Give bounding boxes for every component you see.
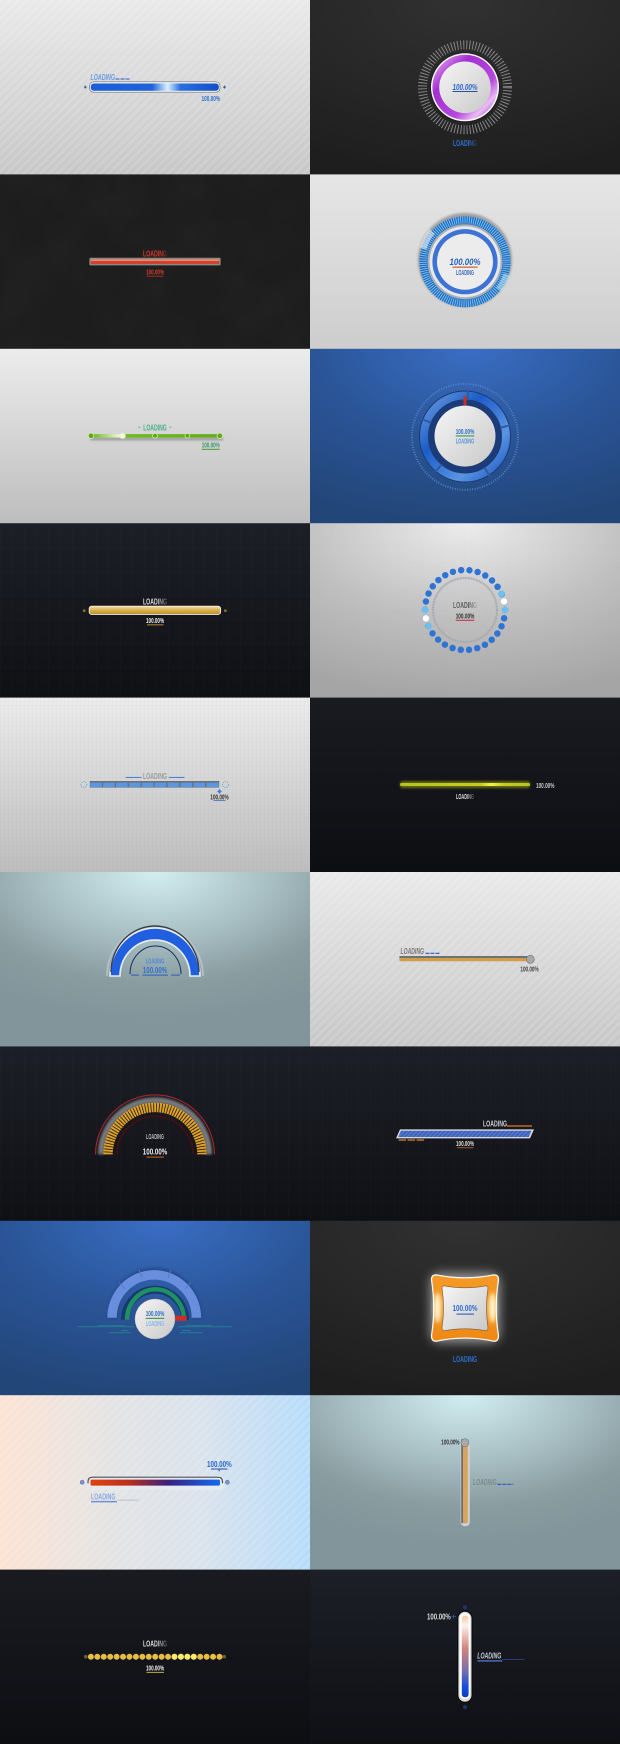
end dots (463, 1605, 467, 1709)
dashed end circles (81, 782, 228, 788)
panel 4: blue segmented dial on light background (310, 174, 620, 349)
red outer arc (96, 1095, 214, 1154)
panel 15: multi-arc gauge with knob (0, 1221, 310, 1396)
underline (214, 799, 226, 802)
percentage: 100.00% (520, 966, 539, 973)
percentage: 100.00% (202, 96, 221, 103)
panel 13: gold tick half-circle gauge (0, 1046, 310, 1221)
end markers (84, 1655, 226, 1658)
panel 10: yellow glowing bar (310, 698, 620, 872)
dashes (116, 78, 130, 80)
light blue segmented arc (112, 1270, 197, 1318)
loading label: LOADING (143, 771, 167, 781)
panel 18: vertical tan bar (310, 1395, 620, 1570)
percentage: 100.00% (143, 1147, 168, 1157)
loading label: LOADING (143, 597, 167, 607)
percentage: 100.00% (210, 795, 229, 802)
pointer (452, 1615, 456, 1619)
loading label: LOADING (146, 959, 165, 966)
underline (456, 1314, 474, 1315)
panel 14: slanted blue bar on dark grid (310, 1046, 620, 1221)
underline (202, 449, 220, 450)
loading label: LOADING (456, 438, 475, 445)
end markers (84, 86, 226, 89)
underline (146, 275, 164, 278)
underline (147, 623, 164, 626)
percentage: 100.00% (427, 1611, 451, 1621)
loading label: LOADING (456, 270, 474, 277)
percentage: 100.00% (143, 965, 168, 975)
progress bar (400, 783, 530, 786)
teal lines (78, 1326, 232, 1333)
bar shadow (90, 437, 223, 440)
panel 17: red-to-blue capsule bar (0, 1395, 310, 1570)
panel 6: blue knob dial (310, 349, 620, 524)
percentage: 100.00% (450, 257, 481, 268)
percentage: 100.00% (456, 1141, 475, 1148)
underline (456, 435, 474, 436)
inner ring (433, 578, 497, 642)
underline (146, 1671, 164, 1674)
label rule (477, 1659, 524, 1662)
progress bar (90, 434, 220, 438)
underline (146, 1157, 164, 1158)
dot ring (425, 570, 505, 650)
dark red inner arc (117, 1116, 193, 1154)
highlighted dots (172, 1654, 197, 1660)
percentage: 100.00% (441, 1439, 460, 1446)
panel 16: orange rounded badge loader (310, 1221, 620, 1396)
panel 3: red bar on mottled dark background (0, 174, 310, 349)
knob (526, 955, 534, 963)
percentage: 100.00% (207, 1459, 232, 1469)
dashes (497, 1483, 513, 1485)
percentage: 100.00% (146, 269, 165, 276)
orange hatch (507, 1125, 532, 1127)
glow (430, 1273, 500, 1343)
tick ring (422, 45, 508, 130)
underline (457, 1146, 474, 1149)
percentage: 100.00% (146, 1665, 165, 1672)
end markers (80, 1480, 229, 1484)
knob (434, 406, 496, 467)
segmented bar (90, 781, 219, 788)
label rule (91, 1500, 138, 1502)
progress bar (89, 258, 221, 265)
inner arc (130, 946, 181, 974)
arc base dashes (131, 975, 180, 976)
loading label: LOADING (456, 794, 474, 801)
orange underline (452, 267, 478, 268)
panel 20: vertical gradient capsule (310, 1570, 620, 1744)
bar glow (400, 781, 530, 788)
gauge arc (107, 926, 203, 976)
progress bar (399, 956, 530, 961)
progress bar (90, 82, 220, 92)
percentage: 100.00% (452, 83, 478, 92)
loading label: LOADING (143, 248, 167, 258)
loading label: LOADING (90, 72, 115, 82)
panel 2: purple dial on dark background (310, 0, 620, 175)
capsule (86, 1476, 225, 1490)
percentage: 100.00% (456, 429, 475, 436)
segmented ring (419, 390, 511, 482)
grey halo arc (101, 1100, 209, 1154)
percentage: 100.00% (452, 1304, 478, 1313)
loading label: LOADING (477, 1651, 502, 1661)
nodes (88, 433, 223, 439)
label markers (138, 426, 171, 428)
loading label: LOADING (483, 1119, 507, 1129)
panel 9: segmented blue bar on light grid (0, 698, 310, 872)
diamond marker (217, 789, 222, 794)
underline (452, 91, 478, 92)
loading label: LOADING (453, 1354, 477, 1364)
dial (418, 213, 512, 307)
capsule (458, 1611, 472, 1702)
progress bar (89, 606, 221, 614)
panel 11: blue half-circle gauge (0, 872, 310, 1047)
panel 7: gold bar on dark grid (0, 523, 310, 698)
green arc (125, 1289, 185, 1320)
red underline (456, 620, 474, 621)
percentage: 100.00% (456, 614, 475, 621)
panel 8: circular dots loader (310, 523, 620, 698)
inner panel (442, 1286, 488, 1331)
orange dashes (399, 1139, 425, 1141)
loading label: LOADING (146, 1134, 164, 1141)
purple ring (430, 52, 500, 122)
loading label: LOADING (91, 1492, 116, 1502)
knob (461, 1439, 469, 1447)
vertical bar (461, 1439, 470, 1526)
slanted progress bar (396, 1129, 534, 1138)
needle (464, 396, 466, 405)
dot row (91, 1654, 220, 1660)
loading label: LOADING (146, 1321, 165, 1328)
panel 12: tan bar with knob on striped background (310, 872, 620, 1047)
label dashes (126, 777, 185, 778)
panel 19: yellow dots bar (0, 1570, 310, 1744)
highlighted dots (422, 590, 508, 630)
percentage: 100.00% (536, 783, 555, 790)
underline (211, 1469, 228, 1471)
loading label: LOADING (473, 1477, 497, 1487)
loading label: LOADING (453, 138, 477, 148)
loading label: LOADING (400, 946, 424, 956)
gold tick arc (108, 1107, 202, 1154)
percentage: 100.00% (146, 1311, 165, 1318)
side highlights (434, 1293, 496, 1323)
red tab (175, 1316, 187, 1321)
dashes (426, 952, 440, 954)
end markers (83, 610, 227, 612)
percentage: 100.00% (146, 618, 165, 625)
panel 5: green node bar (0, 349, 310, 524)
loading label: LOADING (453, 600, 477, 610)
badge frame (432, 1275, 498, 1341)
panel 1: blue loading bar on striped light background (0, 0, 310, 175)
loading label: LOADING (143, 1639, 167, 1649)
knob (135, 1299, 175, 1339)
dotted outer ring (412, 384, 518, 490)
percentage: 100.00% (202, 443, 220, 450)
underline (146, 1318, 164, 1319)
loading label: LOADING (143, 422, 167, 432)
